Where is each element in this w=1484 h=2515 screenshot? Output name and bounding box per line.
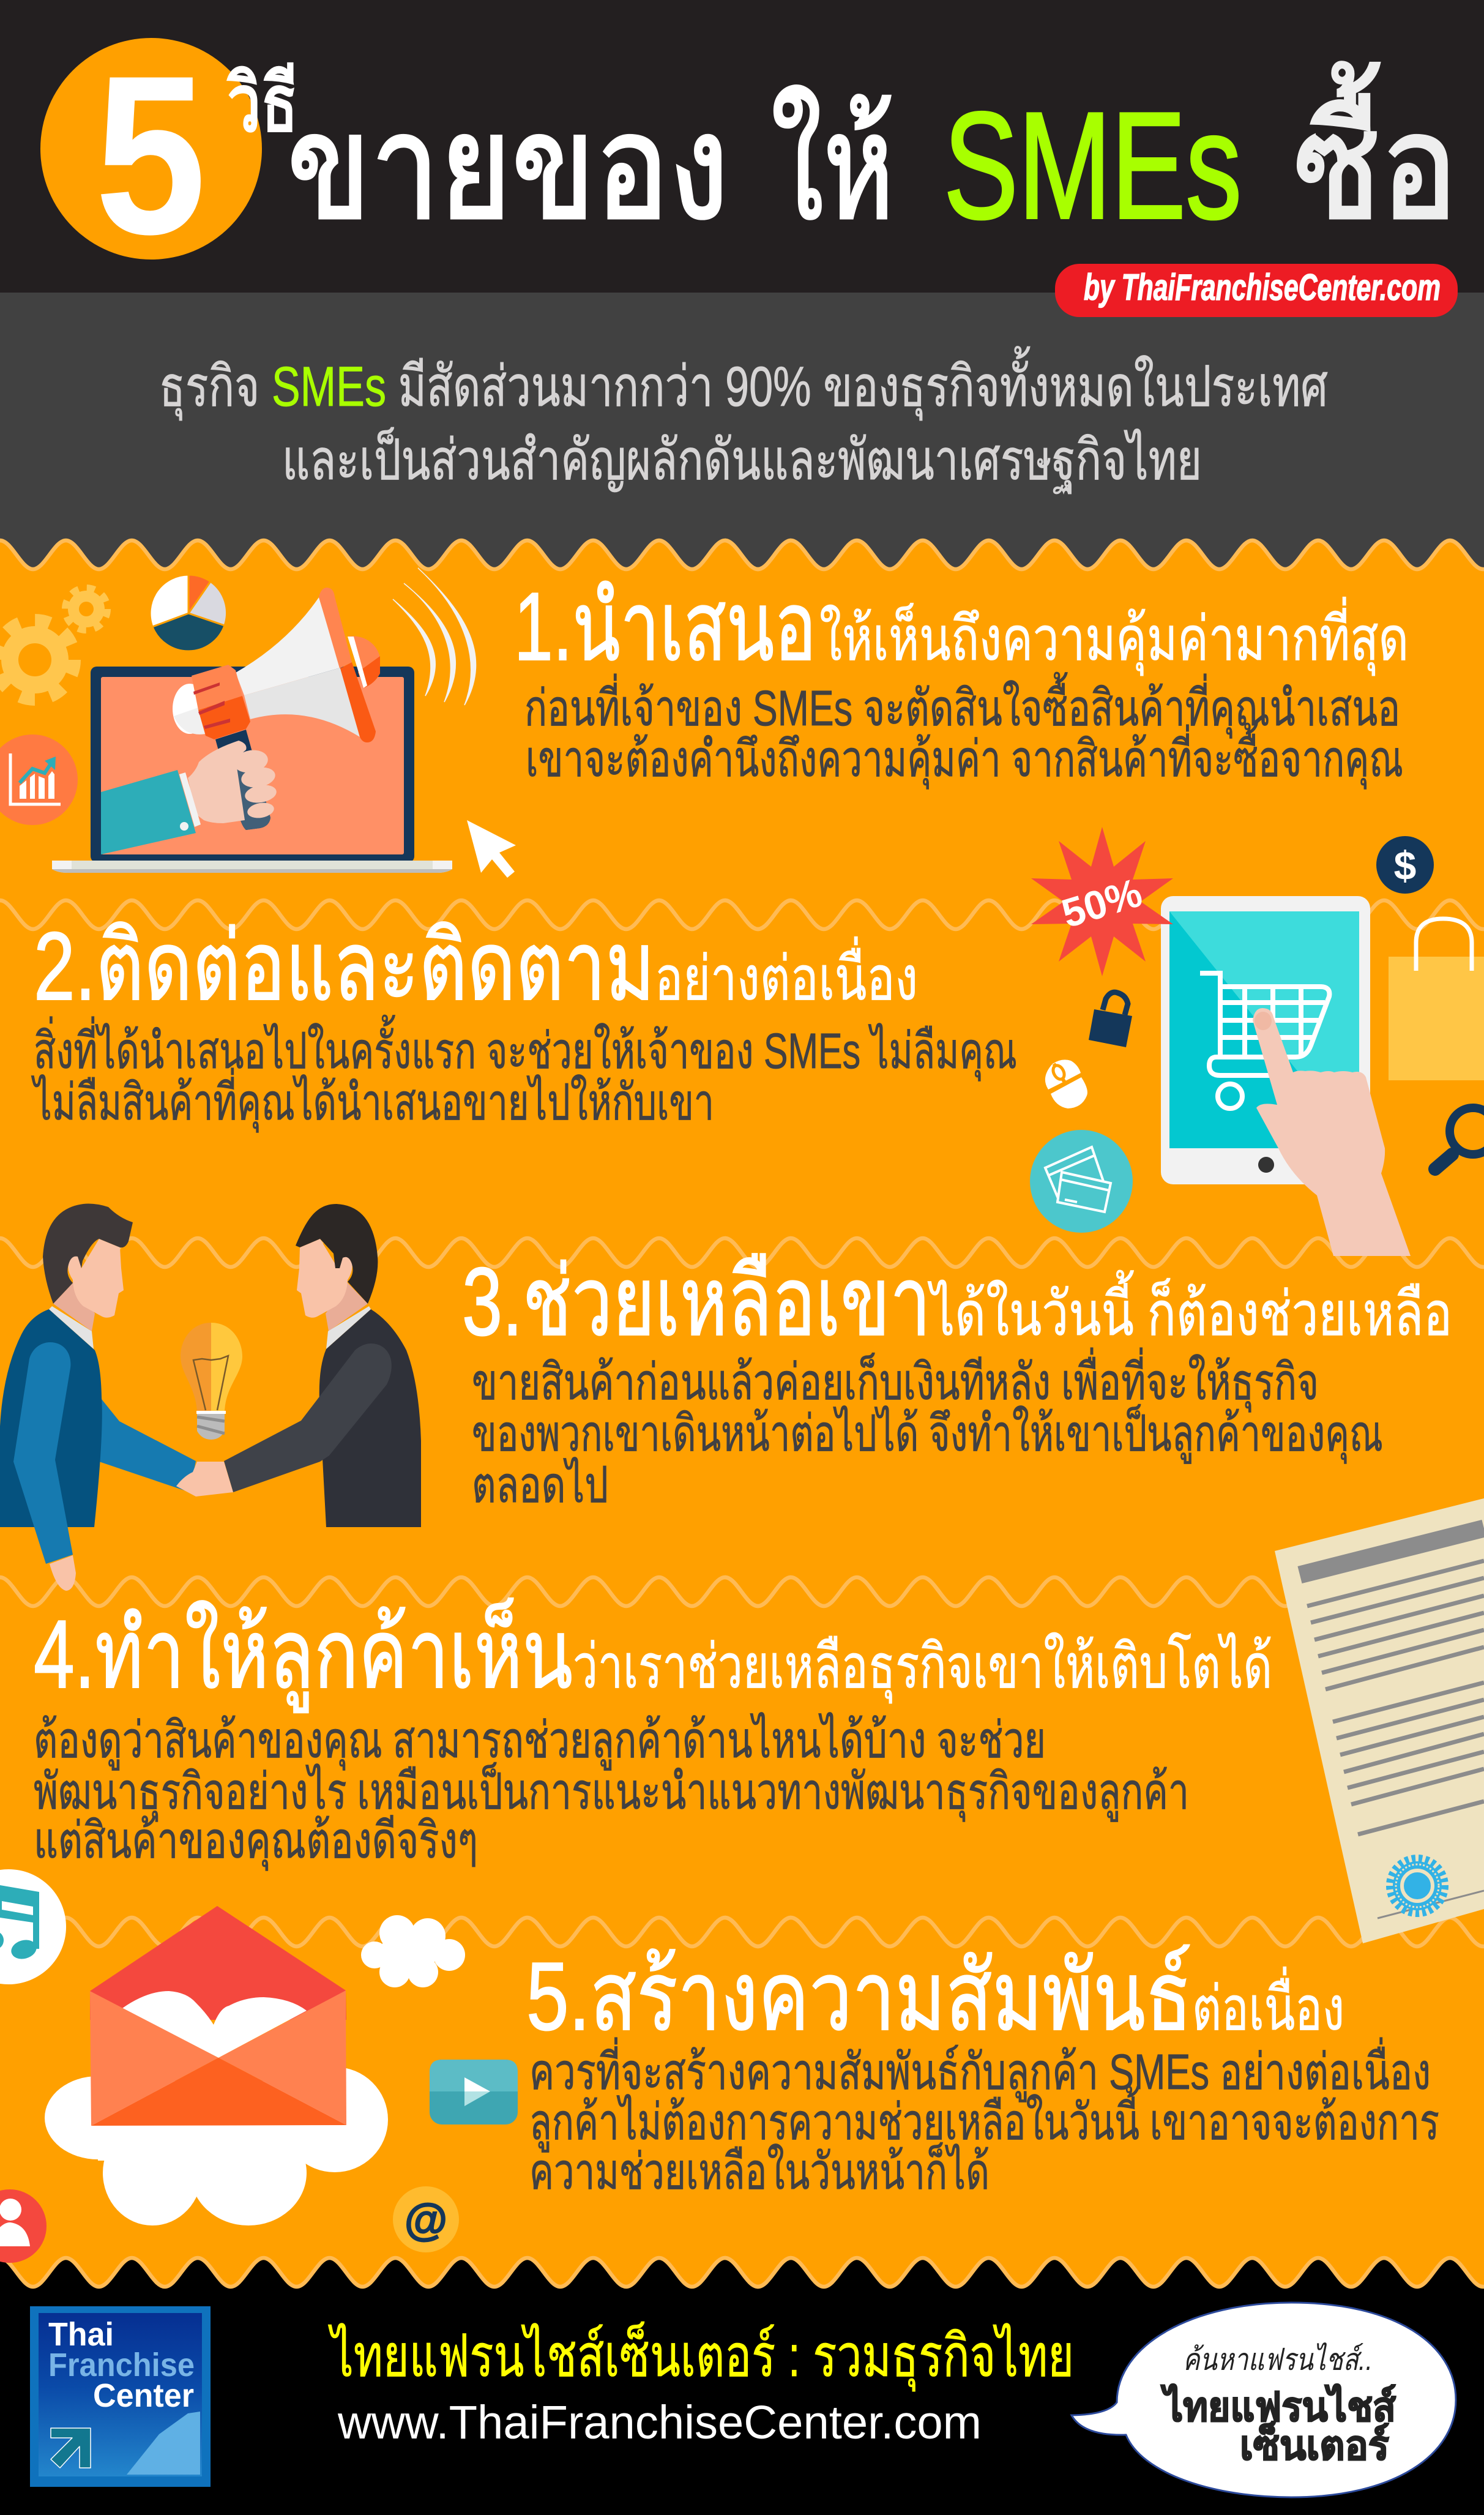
heading 4 [34,1598,1272,1713]
body 4: ต้องดูว่าสินค้าของคุณ สามารถช่วยลูกค้าด้านไหนได้บ้าง จะช่วย [34,1713,1046,1771]
icon: at sign circle [393,2186,459,2252]
body 5 [529,2037,1439,2200]
icon: dollar coin: $ [1394,843,1416,888]
icon: music note circle [0,1869,66,1984]
icon: computer mouse [1045,1059,1087,1108]
intro text [159,346,1328,495]
icon: shopping cart [1200,973,1329,1108]
icon: light bulb [181,1323,242,1440]
icon: laptop [52,667,452,873]
body 1 [524,672,1403,790]
panel: orange body background [0,539,1484,2295]
section 2 text [31,913,1017,1133]
section 1 text [514,573,1409,790]
body 4 [34,1713,1189,1871]
footer website url: www.ThaiFranchiseCenter.com [337,2396,982,2449]
intro text: และเป็นส่วนสำคัญผลักดันและพัฒนาเศรษฐกิจไทย [282,427,1202,495]
section 5 illustration: envelope on cloud [0,1869,518,2263]
heading 4: 4.ทำให้ลูกค้าเห็น [34,1598,573,1713]
footer logo: Thai Franchise Center [30,2306,211,2487]
icon: pie chart [150,575,226,651]
icon: small cloud [361,1915,465,1987]
icon: paper sheet [1275,1498,1484,1943]
section 1 illustration: megaphone on laptop [0,568,516,878]
heading 1: 1.นำเสนอ [514,573,816,681]
panel: black footer background [0,2258,1484,2515]
section 2 illustration: tablet shopping [1030,827,1484,1256]
heading 3 [462,1248,1452,1356]
icon: small gear [66,589,106,629]
icon: right businessman [176,1204,421,1527]
icon: left businessman [0,1204,196,1591]
footer tagline: ไทยแฟรนไชส์เซ็นเตอร์ : รวมธุรกิจไทย [328,2321,1074,2392]
speech bubble: ไทยแฟรนไชส์ [1160,2383,1396,2429]
title word: ให้: ให้ [771,85,894,249]
heading 2: 2.ติดต่อและติดตาม [34,913,655,1020]
badge: orange circle with number 5 [40,29,262,282]
heading 2: อย่างต่อเนื่อง [655,936,918,1013]
icon: dollar coin [1376,836,1434,894]
icon: padlock [1089,992,1132,1047]
icon: sound waves [393,568,476,705]
icon: growth chart circle [0,734,78,825]
footer logo: Thai Franchise Center: Center [93,2377,194,2414]
heading 3: 3.ช่วยเหลือเขา [462,1248,931,1356]
icon: document text lines [1300,1528,1484,1918]
icon: cursor arrow [467,820,516,878]
icon: hand and sleeve [101,741,278,854]
section 3 illustration: business handshake [0,1204,421,1591]
footer logo: Thai Franchise Center: Thai [48,2316,114,2353]
icon: 50 percent starburst: 50% [1056,869,1147,936]
section 4 text [34,1598,1272,1871]
section 4 illustration: certificate document [1275,1498,1484,1943]
icon: blue seal [1390,1859,1444,1913]
panel: grey intro background [0,293,1484,540]
title word: SMEs: SMEs [944,80,1242,250]
icon: at sign circle: @ [405,2195,447,2244]
body 5: ความช่วยเหลือในวันหน้าก็ได้ [529,2142,990,2200]
speech bubble: ค้นหาแฟรนไชส์.. [1183,2342,1373,2377]
section 3 text [462,1248,1452,1513]
icon: shopping bag [1389,919,1484,1080]
icon: megaphone [173,588,380,830]
icon: large gear [0,622,73,698]
title word: วิธี: วิธี [226,59,298,148]
byline pill [1055,264,1458,317]
body 3: ตลอดไป [472,1457,608,1513]
speech bubble [1072,2303,1456,2497]
body 2: ไม่ลืมสินค้าที่คุณได้นำเสนอขายไปให้กับเขา [31,1067,714,1133]
icon: magnifier [1435,1108,1484,1169]
speech bubble: เซ็นเตอร์ [1240,2421,1389,2468]
icon: play button [430,2060,518,2124]
title word: ขายของ: ขายของ [287,85,729,249]
body 2 [31,1015,1017,1133]
icon: tablet [1161,896,1370,1184]
title block [40,29,1458,282]
icon: 50 percent starburst [1031,827,1173,976]
icon: pointing hand [1253,1008,1411,1256]
heading 5: ต่อเนื่อง [1192,1967,1344,2043]
footer logo: Thai Franchise Center: Franchise [48,2347,195,2383]
section 5 text [526,1943,1439,2200]
body 3 [472,1347,1383,1513]
body 4: แต่สินค้าของคุณต้องดีจริงๆ [34,1813,478,1871]
panel: dark title background [0,0,1484,293]
body 2: สิ่งที่ได้นำเสนอไปในครั้งแรก จะช่วยให้เจ้าของ SMEs ไม่ลืมคุณ [34,1015,1017,1082]
icon: person circle [0,2189,47,2263]
icon: large cloud [45,2067,388,2225]
heading 5: 5.สร้างความสัมพันธ์ [526,1943,1192,2050]
icon: envelope [90,1906,346,2126]
heading 1 [514,573,1409,681]
icon: credit cards circle [1030,1130,1133,1233]
badge: orange circle with number 5: 5 [95,29,206,282]
title word: ซื้อ: ซื้อ [1294,62,1458,249]
